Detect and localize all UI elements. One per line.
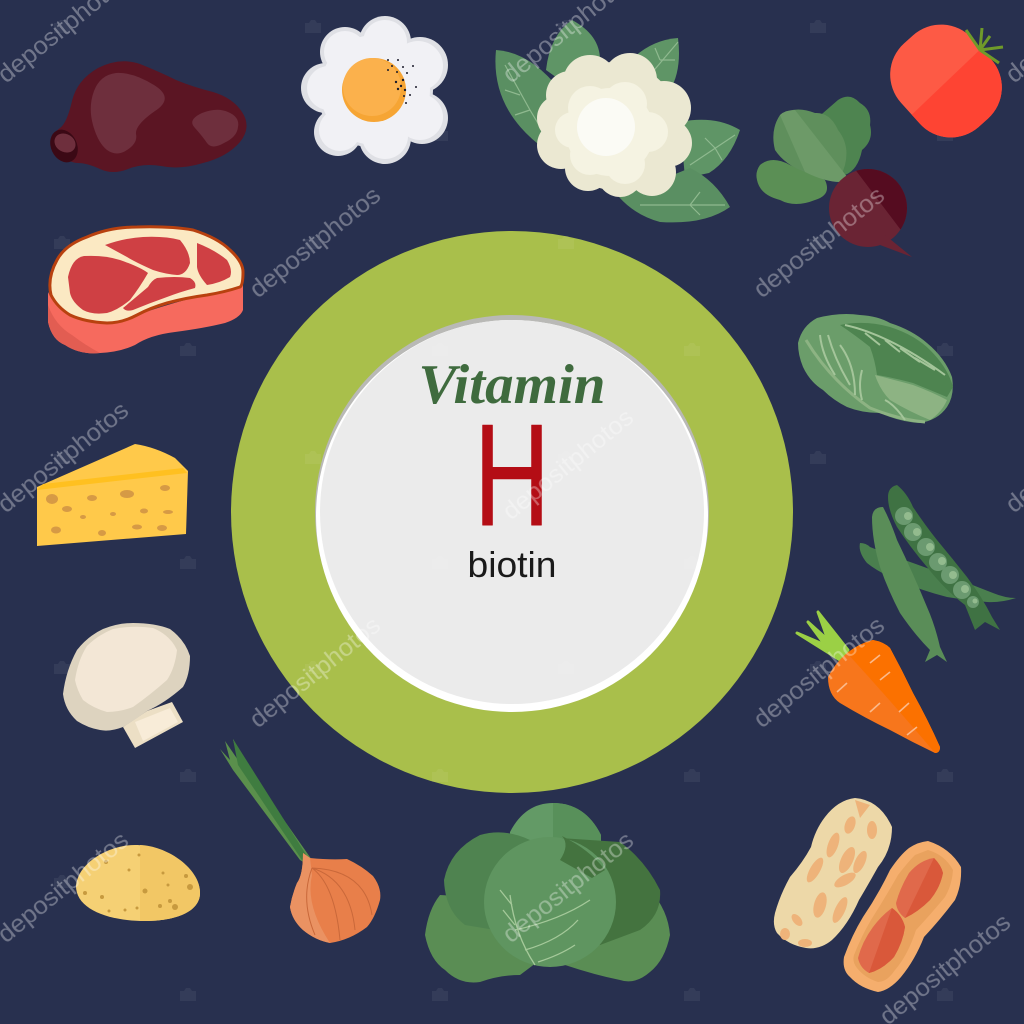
icon: cauliflower [495,20,740,222]
watermarks: depositphotos [497,403,639,526]
icon: chinese cabbage [798,314,953,423]
icon: beetroot [756,97,912,257]
label: biotin: biotin [468,544,556,585]
icon: tomato [890,24,1004,138]
icon: steak [48,227,243,353]
icon: carrot [797,612,940,753]
plate [231,231,793,793]
watermarks: depositphotos [244,611,386,734]
watermarks: depositphotos [748,611,890,734]
icon: peanuts [774,798,961,992]
icon: liver [45,61,247,172]
watermarks: depositphotos [244,181,386,304]
icon: fried egg [301,16,448,164]
letter H: H [474,394,550,556]
icon: peas [860,485,1016,662]
title: Vitamin: Vitamin [418,354,606,416]
icon: cheese [37,444,188,546]
icon: mushroom [63,623,190,748]
icon: onion [220,739,380,943]
watermarks: depositphotos [748,181,890,304]
watermarks: depositphotos [497,826,639,949]
icon: potato [76,845,200,921]
icon: cabbage [425,803,670,982]
